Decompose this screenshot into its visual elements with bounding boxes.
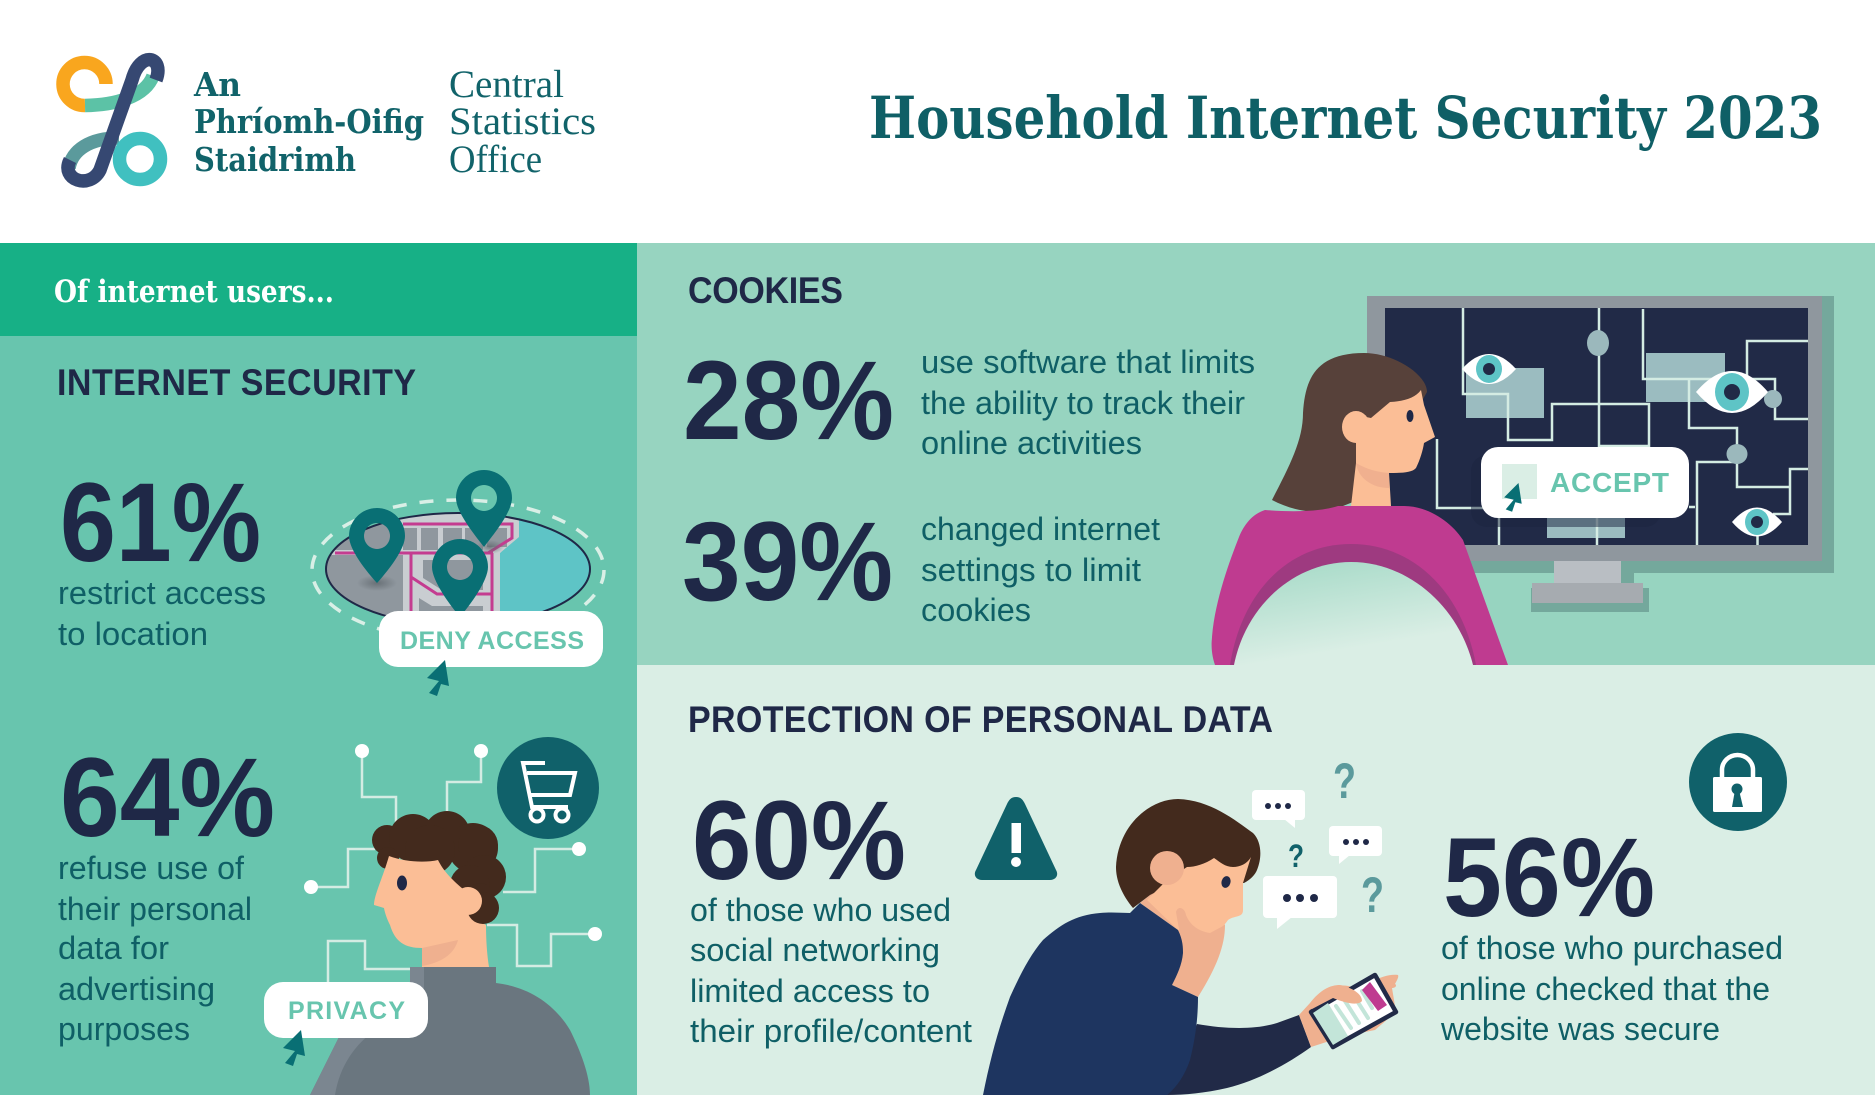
stat: 56%: 56% [1443, 815, 1655, 940]
text: restrict access [58, 575, 266, 652]
icon: eye 2 [1696, 371, 1768, 413]
panel: cookies [637, 243, 1875, 665]
question marks [1288, 753, 1384, 923]
sweater [1212, 506, 1508, 665]
text: refuse use: advertising [58, 971, 215, 1007]
arm [1167, 1015, 1311, 1095]
icon: cursor [427, 660, 449, 696]
stat: 64%: 64% [60, 735, 275, 860]
text: restrict access: to location [58, 616, 208, 652]
band: of internet users: Of internet users... [54, 274, 334, 310]
hair [1116, 799, 1260, 908]
heading: cookies: COOKIES [688, 270, 843, 311]
logo mark [63, 60, 160, 181]
hair [1272, 353, 1427, 512]
neck and face [1351, 390, 1435, 506]
band: of internet users [0, 243, 637, 336]
text: use software [921, 344, 1255, 461]
bubble 2 [1329, 826, 1382, 864]
text: restrict access: restrict access [58, 575, 266, 611]
chair [1234, 562, 1473, 665]
pin 2 [456, 470, 512, 547]
neck [1140, 870, 1225, 997]
text: use software: use software that limits [921, 344, 1255, 380]
button: privacy: PRIVACY [288, 997, 405, 1025]
icon: eye 3 [1732, 508, 1782, 536]
hair [372, 811, 506, 907]
text: refuse use: their personal [58, 891, 252, 927]
text: changed settings: changed internet [921, 511, 1160, 547]
stat: 39%: 39% [682, 499, 893, 624]
illustration: circuit lines [304, 744, 602, 982]
stat: 61%: 61% [60, 460, 261, 585]
question marks: ? [1333, 753, 1356, 809]
question marks: ? [1361, 867, 1384, 923]
stat: 28%: 28% [683, 338, 894, 463]
panel: protection of personal data [637, 665, 1875, 1095]
eye [397, 876, 407, 890]
icon: warning triangle [975, 797, 1057, 880]
illustration: monitor [1367, 296, 1834, 612]
text: refuse use [58, 850, 252, 1047]
icon: eye 1 [1462, 354, 1516, 384]
icon: shopping cart [497, 737, 599, 839]
text: changed settings: cookies [921, 592, 1031, 628]
neck [422, 900, 489, 967]
text: purchased online: online checked that the [1441, 971, 1770, 1007]
icon: cursor [283, 1030, 305, 1066]
logo text: English: Office [449, 138, 542, 181]
text: social networking: social networking [690, 932, 940, 968]
text: changed settings [921, 511, 1160, 628]
sweater [310, 967, 590, 1095]
text: refuse use: data for [58, 930, 169, 966]
text: purchased online [1440, 930, 1783, 1047]
panel: internet security [0, 243, 637, 1095]
bubble 3 [1263, 876, 1337, 929]
button: deny access [379, 611, 603, 667]
question marks: ? [1288, 838, 1304, 874]
speech bubbles [1252, 790, 1382, 929]
text: purchased online: of those who purchased [1441, 930, 1783, 966]
logo text: Irish [193, 65, 424, 179]
text: social networking: of those who used [690, 892, 951, 928]
text: social networking: their profile/content [690, 1013, 972, 1049]
logo text: Irish: Staidrimh [194, 140, 356, 179]
text: social networking: limited access to [690, 973, 930, 1009]
phone [1311, 975, 1396, 1047]
hand and fingers [1299, 975, 1398, 1047]
text: changed settings: settings to limit [921, 552, 1141, 588]
button: accept: ACCEPT [1550, 467, 1669, 498]
button: deny access: DENY ACCESS [400, 627, 584, 655]
logo text: Irish: An [193, 65, 241, 104]
illustration: map with pins [312, 470, 604, 640]
jacket [983, 903, 1198, 1095]
text: purchased online: website was secure [1440, 1011, 1720, 1047]
face [1147, 857, 1251, 935]
logo text: Irish: Phríomh-Oifig [194, 102, 424, 141]
illustration: man with phone [983, 799, 1398, 1095]
button: privacy [264, 982, 428, 1038]
text: use software: the ability to track their [921, 385, 1245, 421]
text: social networking [690, 892, 972, 1049]
logo text: English: Statistics [449, 100, 596, 143]
illustration: person with curly hair [310, 811, 590, 1095]
pin 1 [349, 508, 405, 583]
logo text: English: Central [449, 63, 564, 106]
pin 3 [432, 539, 488, 617]
page header [0, 0, 1875, 243]
text: refuse use: purposes [58, 1011, 190, 1047]
text: use software: online activities [921, 425, 1142, 461]
heading: protection of personal data: PROTECTION OF PERSONAL DATA [688, 699, 1273, 740]
stat: 60%: 60% [692, 778, 906, 903]
text: refuse use: refuse use of [58, 850, 244, 886]
bubble 1 [1252, 790, 1305, 828]
heading: internet security: INTERNET SECURITY [57, 362, 416, 403]
screen wires [1437, 308, 1808, 545]
screen blocks [1466, 353, 1725, 538]
logo text: English [449, 63, 596, 181]
illustration: woman at monitor [1212, 353, 1508, 665]
face [374, 856, 478, 948]
button: accept [1471, 447, 1689, 527]
icon: padlock [1689, 733, 1787, 831]
